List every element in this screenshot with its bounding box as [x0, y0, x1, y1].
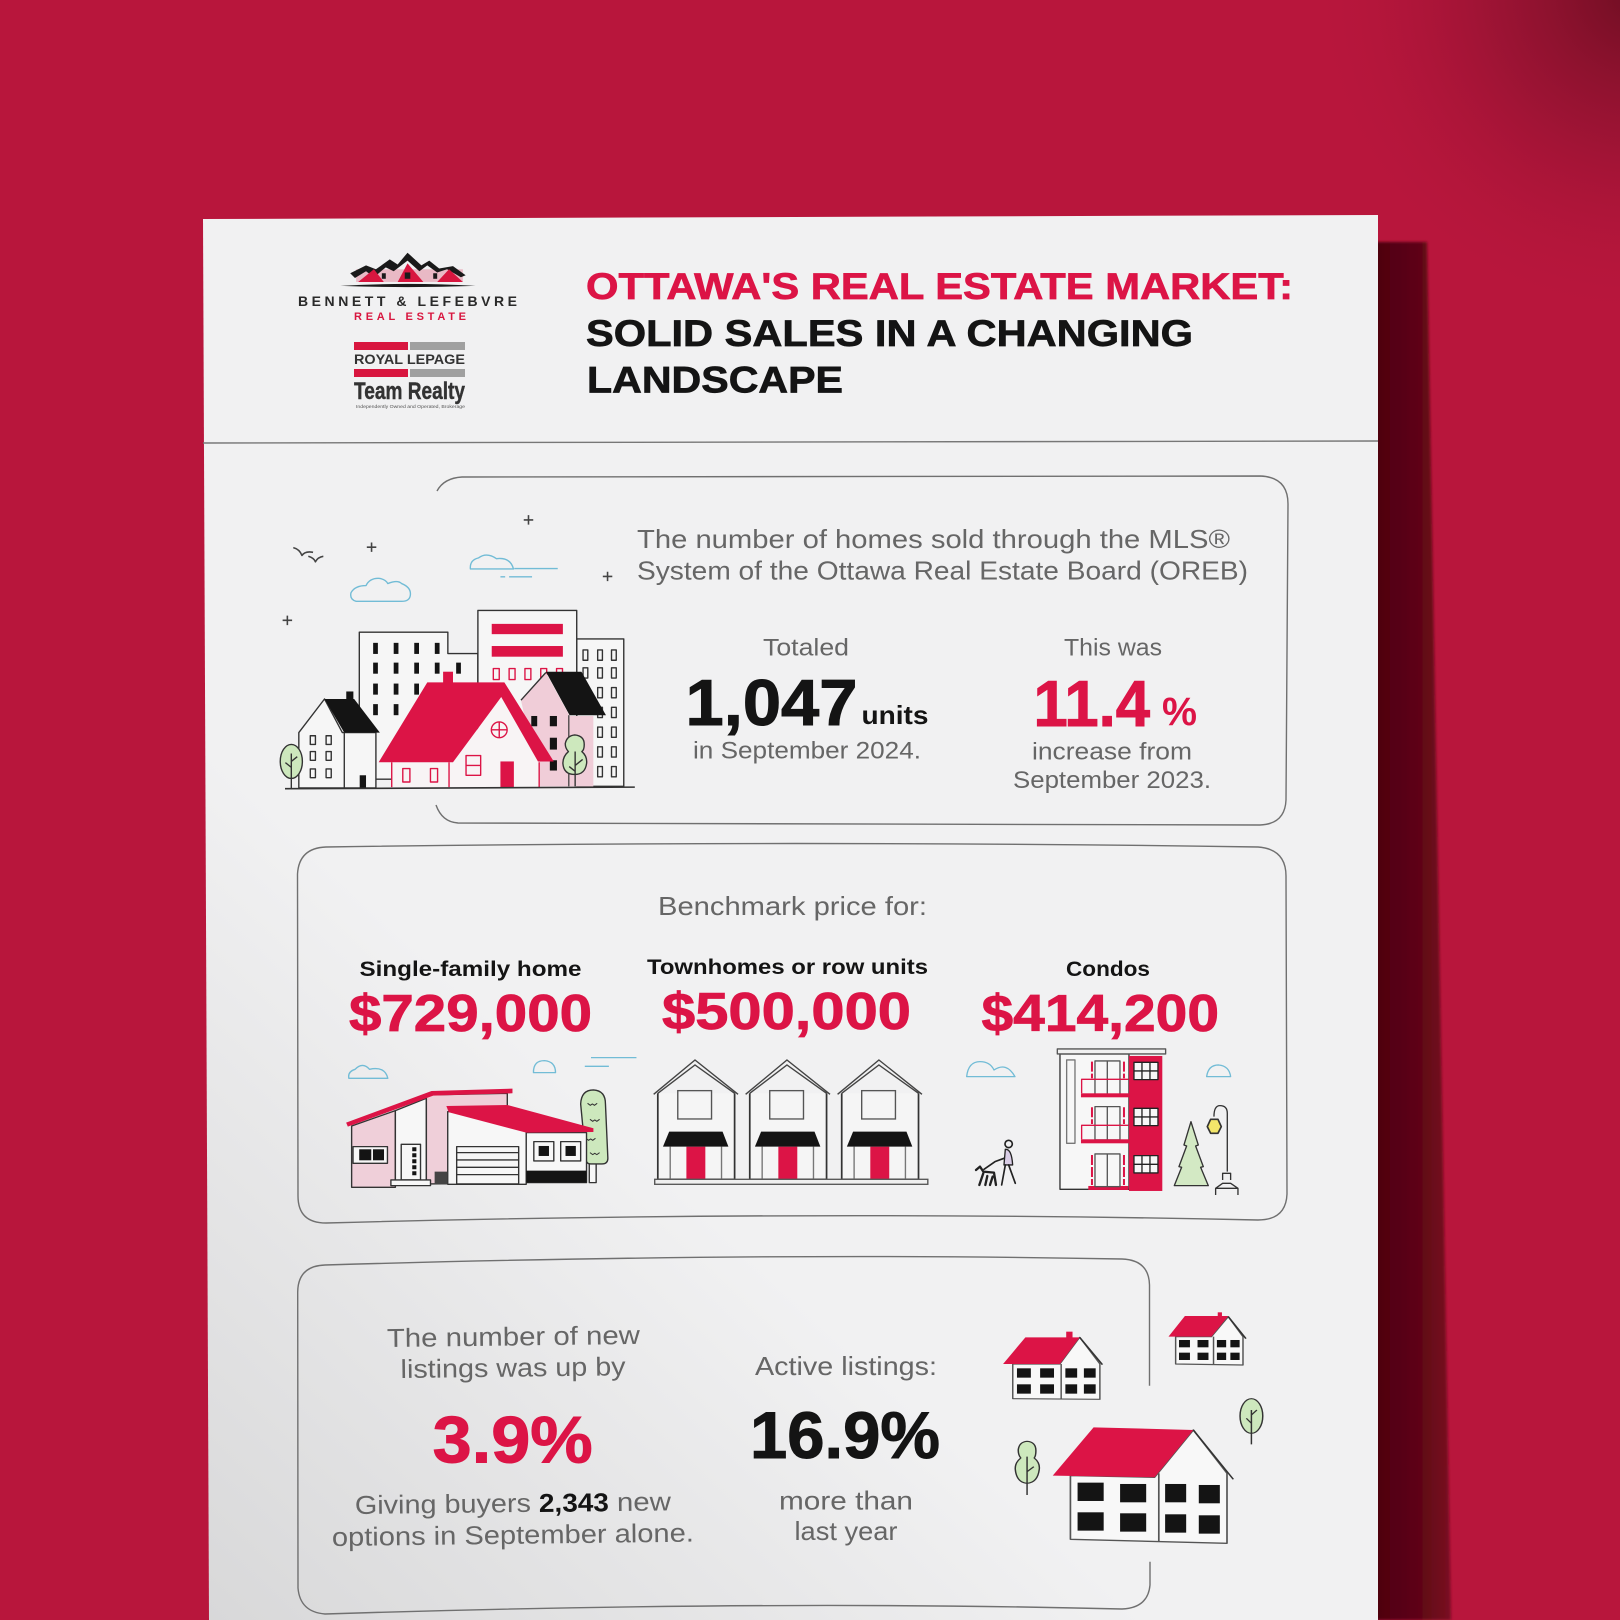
house walls: [352, 1093, 587, 1187]
logo text: tagline: Independently Owned and Operated, Brokerage: [356, 404, 466, 409]
house B: [1168, 1312, 1246, 1365]
price: single-family home: [349, 957, 592, 1043]
illustration: city skyline with houses: [280, 515, 635, 789]
price: single-family home: $729,000: [349, 985, 592, 1043]
title: [586, 266, 1293, 400]
stat: total units: Totaled: [763, 634, 849, 662]
big house: [1053, 1427, 1233, 1543]
townhome 2: [746, 1060, 830, 1179]
panel: listings: [298, 1257, 1150, 1614]
title line 2: SOLID SALES IN A CHANGING: [586, 313, 1193, 354]
header divider: [203, 441, 1378, 443]
garage door: [457, 1147, 519, 1184]
stat: total units: 1,047: [686, 666, 858, 739]
panel outline: benchmark prices: [298, 844, 1287, 1223]
logo text: Real Estate: REAL ESTATE: [354, 311, 466, 323]
pine tree: [1174, 1122, 1208, 1186]
active listings stat: [750, 1351, 940, 1546]
stat: total units: units: [862, 700, 928, 730]
clouds: [351, 555, 558, 601]
title line 1: OTTAWA'S REAL ESTATE MARKET:: [586, 266, 1293, 307]
intro text: System of the Ottawa Real Estate Board (OREB): [637, 556, 1248, 586]
stat: percent increase: 11.4: [1034, 667, 1150, 740]
new listings stat: The number of new: [387, 1320, 640, 1353]
tree: [581, 1090, 608, 1183]
trees: [280, 735, 587, 789]
active listings stat: 16.9%: [750, 1398, 940, 1472]
benchmark heading: Benchmark price for:: [658, 891, 927, 921]
sparkles and birds: [283, 515, 612, 625]
new listings stat: Giving buyers: [355, 1488, 531, 1520]
stat: percent increase: This was: [1064, 634, 1162, 662]
main red-roof house: [379, 672, 554, 787]
panel outline: listings: [298, 1257, 1150, 1614]
price: condos: Condos: [1066, 957, 1150, 981]
intro text: The number of homes sold through the MLS®: [637, 524, 1230, 554]
active listings stat: more than: [779, 1486, 913, 1516]
paper sheet: [203, 215, 1378, 1620]
panel: homes sold: [436, 476, 1288, 825]
new listings stat: 3.9%: [433, 1402, 593, 1476]
condo building: [1057, 1049, 1166, 1191]
clouds: [967, 1062, 1231, 1077]
illustration: three townhomes: [654, 1060, 928, 1184]
stat: percent increase: [1013, 634, 1211, 794]
price: condos: [982, 957, 1219, 1043]
townhome base: [655, 1179, 928, 1184]
clouds and wind: [349, 1058, 636, 1078]
townhome 3: [838, 1060, 922, 1179]
red banded windows: [492, 624, 563, 657]
black windows: [373, 643, 461, 715]
illustration: condo building and street: [967, 1049, 1238, 1195]
stat: total units: [686, 634, 928, 764]
new listings stat: options in September alone.: [332, 1518, 694, 1552]
price: townhomes: Townhomes or row units: [647, 955, 928, 979]
price: townhomes: [647, 955, 928, 1041]
icon: roofline logo: [340, 253, 476, 287]
header logo: Bennett & Lefebvre, Royal LePage: [298, 253, 517, 409]
new listings stat: listings was up by: [400, 1351, 626, 1384]
house A: [1003, 1332, 1102, 1399]
pink house with black roof: [521, 672, 606, 786]
townhome 1: [654, 1060, 738, 1179]
price: single-family home: Single-family home: [360, 957, 582, 981]
title line 3: LANDSCAPE: [587, 360, 843, 400]
logo text: Bennett & Lefebvre: BENNETT & LEFEBVRE: [298, 293, 517, 309]
new listings stat: new: [617, 1486, 671, 1517]
stat: total units: in September 2024.: [693, 738, 921, 764]
buildings: [359, 610, 624, 786]
left house: [299, 691, 380, 788]
condo windows: [1134, 1062, 1158, 1173]
street lamp: [1207, 1106, 1238, 1195]
panel outline: homes sold: [436, 476, 1288, 825]
active listings stat: Active listings:: [755, 1351, 937, 1381]
person walking dog: [976, 1140, 1015, 1185]
logo text: Royal LePage: ROYAL LEPAGE: [354, 352, 465, 367]
illustration: three red-roof houses with trees: [1003, 1312, 1263, 1543]
paper shadow: [1372, 242, 1451, 1620]
stat: percent increase: %: [1162, 690, 1197, 734]
ground line: [285, 787, 635, 789]
price: townhomes: $500,000: [662, 983, 911, 1041]
roofs: [346, 1089, 512, 1127]
balconies: [1081, 1061, 1129, 1187]
tree left: [1015, 1441, 1039, 1495]
tree right: [1240, 1399, 1263, 1444]
windows and door: [353, 1142, 587, 1186]
illustration: single-family home: [346, 1058, 636, 1187]
stat: percent increase: increase from: [1032, 738, 1192, 766]
new listings stat: [332, 1320, 694, 1552]
new listings stat: 2,343: [539, 1487, 609, 1518]
panel: benchmark prices: [298, 844, 1287, 1223]
logo text: Team Realty: Team Realty: [354, 378, 466, 405]
logo: Royal LePage bars: [354, 342, 465, 377]
right tower windows: [583, 650, 616, 777]
intro text: [637, 524, 1248, 586]
price: condos: $414,200: [982, 985, 1219, 1043]
active listings stat: last year: [794, 1516, 898, 1546]
stat: percent increase: September 2023.: [1013, 767, 1211, 794]
